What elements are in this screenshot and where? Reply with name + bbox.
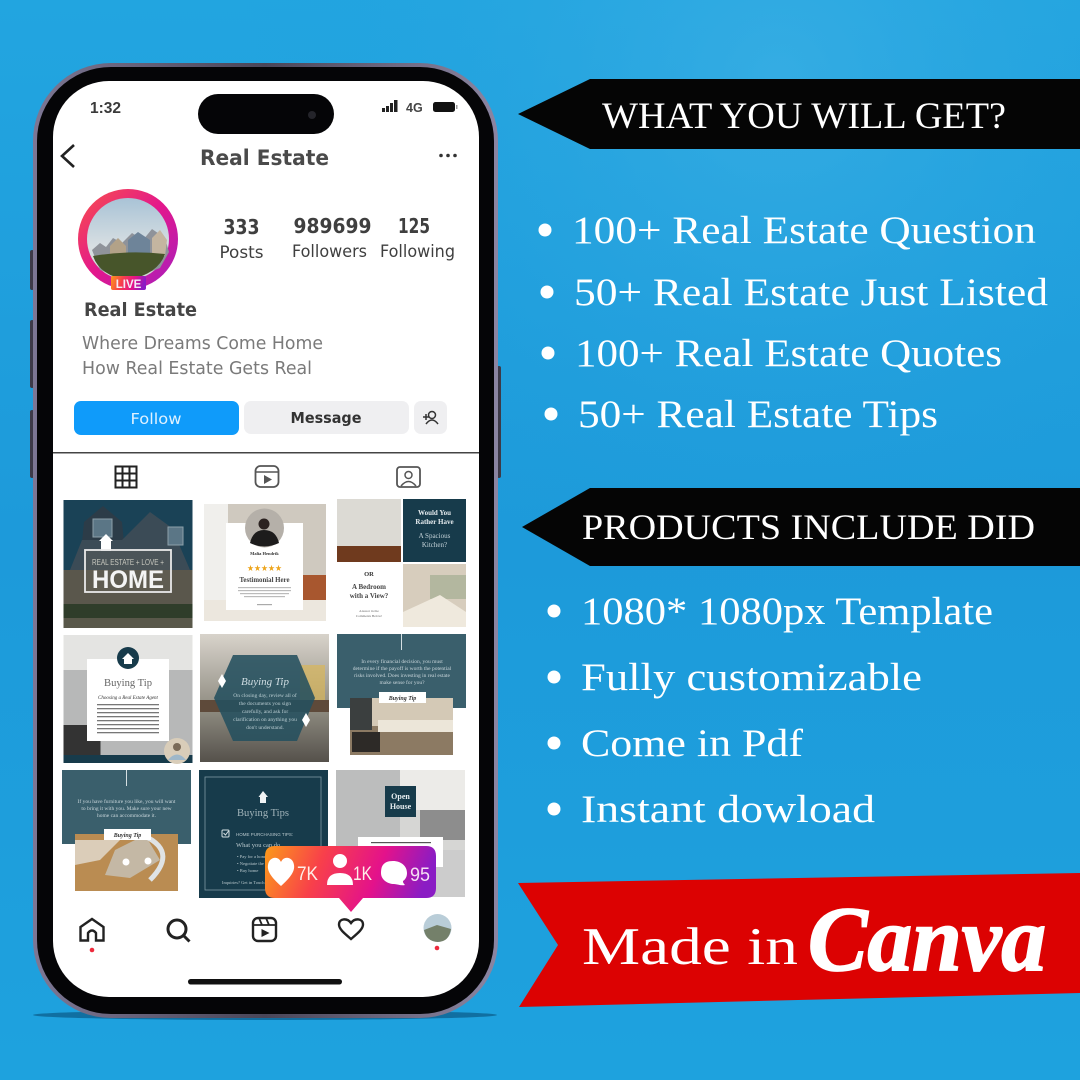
post: would you rather: A Bedroom: [352, 583, 386, 591]
icon: reels: [253, 918, 276, 941]
list item: 50+ Real Estate Tips: [578, 392, 938, 436]
profile stats: 989699: [294, 214, 372, 238]
post: make sure: Buying Tip: [113, 833, 141, 839]
icon: search: [168, 920, 190, 942]
icon: speech bubble: [381, 861, 407, 885]
post: financial decision: make sense for you?: [379, 679, 425, 686]
post: open house: [336, 770, 465, 897]
post: home: [64, 500, 192, 628]
post: buying tip hexagon: Buying Tip: [241, 676, 289, 688]
post: testimonial: [204, 504, 326, 621]
banner: products include: [522, 488, 1080, 566]
post: buying tip card: Buying Tip: [104, 678, 152, 689]
ribbon: made in canva: [518, 873, 1080, 1007]
notification badge: 95: [410, 865, 430, 886]
post: open house: House: [390, 802, 412, 811]
icon: home: [80, 919, 104, 940]
post: would you rather: Would You: [418, 509, 451, 517]
profile stats: [220, 214, 455, 262]
action buttons: Message: [290, 409, 362, 427]
post: make sure: If you have furniture you like, you will want: [78, 798, 176, 805]
banner: what you will get: WHAT YOU WILL GET?: [602, 96, 1006, 137]
list: products include: [548, 589, 993, 831]
post: would you rather: [337, 499, 466, 627]
profile header: [62, 145, 457, 171]
post: buying tips list: Inquiries? Get in Touch: [222, 880, 265, 885]
post: financial decision: Buying Tip: [388, 696, 416, 702]
post: would you rather: A Spacious: [419, 532, 451, 540]
profile bio: [82, 299, 323, 379]
ribbon: made in canva: Made in: [582, 918, 798, 976]
post: buying tip hexagon: On closing day, review all of: [233, 692, 297, 699]
status bar: 1:32: [90, 100, 121, 117]
post: home: REAL ESTATE + LOVE +: [92, 558, 164, 567]
profile stats: Following: [380, 242, 455, 261]
post: buying tip card: [64, 635, 192, 764]
post: testimonial: ★★★★★: [247, 563, 282, 573]
list item: 100+ Real Estate Quotes: [575, 331, 1002, 375]
post: home: HOME: [92, 566, 164, 594]
post: make sure: [62, 770, 191, 891]
post: would you rather: Answer in the: [359, 609, 379, 613]
icon: profile thumbnail: [424, 914, 452, 942]
post: buying tip hexagon: carefully, and ask for: [242, 708, 288, 715]
action buttons: Follow: [130, 410, 182, 428]
post: buying tips list: [199, 770, 328, 898]
profile stats: 333: [224, 215, 260, 239]
list item: 1080* 1080px Template: [581, 589, 993, 633]
phone body: [30, 63, 501, 1020]
profile stats: Posts: [220, 243, 264, 262]
avatar with live badge: [78, 189, 178, 291]
status bar: 4G: [406, 101, 423, 115]
list item: Fully customizable: [581, 655, 922, 699]
post: buying tip hexagon: the documents you sign: [239, 701, 291, 707]
list item: 100+ Real Estate Question: [572, 208, 1036, 252]
action buttons: [74, 401, 447, 435]
home indicator: [188, 979, 342, 984]
post: financial decision: [337, 634, 466, 755]
post: financial decision: risks involved. Does investing in real estate: [354, 673, 450, 679]
post: buying tips list: • Buy home: [237, 868, 258, 873]
notification badge: 1K: [353, 864, 372, 885]
profile bio: Where Dreams Come Home: [82, 333, 323, 354]
post: financial decision: In every financial decision, you must: [361, 658, 443, 665]
post: would you rather: OR: [364, 571, 374, 578]
list item: Instant dowload: [581, 787, 875, 831]
icon: heart outline: [339, 919, 363, 939]
ribbon: made in canva: Canva: [808, 888, 1046, 990]
post: would you rather: Kitchen?: [422, 541, 447, 549]
post: testimonial: Testimonial Here: [240, 576, 290, 584]
profile header: Real Estate: [200, 146, 329, 171]
profile bio: How Real Estate Gets Real: [82, 358, 312, 379]
profile stats: 125: [398, 214, 430, 238]
post: buying tip card: Choosing a Real Estate Agent: [98, 696, 159, 701]
post: make sure: to bring it with you. Make sure your new: [81, 806, 172, 812]
phone mockup: [30, 63, 501, 1020]
icon: heart: [268, 858, 294, 886]
post: would you rather: with a View?: [350, 592, 389, 600]
list: what you get: [538, 208, 1048, 436]
post: buying tips list: • Negotiate the: [237, 861, 264, 866]
post: buying tips list: • Pay for a home: [237, 854, 267, 859]
post: open house: Open: [391, 792, 410, 801]
post: make sure: home can accommodate it.: [97, 813, 157, 819]
post: financial decision: determine if the payoff is worth the potential: [353, 665, 452, 672]
post: would you rather: Comments Below!: [356, 614, 382, 618]
bottom navigation: [80, 914, 452, 952]
post: buying tip hexagon: clarification on anything you: [233, 716, 297, 723]
banner: what you will get: [518, 79, 1080, 149]
post: buying tips list: Buying Tips: [237, 808, 289, 819]
notification badge: [265, 846, 436, 912]
list item: Come in Pdf: [581, 721, 804, 765]
icon: person: [327, 854, 353, 885]
post: buying tips list: HOME PURCHASING TIPS:: [236, 832, 293, 837]
notification badge: 7K: [297, 864, 318, 885]
avatar with live badge: LIVE: [116, 279, 142, 291]
status bar: [90, 94, 458, 134]
profile tabs: [116, 466, 420, 488]
banner: products include: PRODUCTS INCLUDE DID: [582, 507, 1035, 547]
post: buying tip hexagon: don't understand.: [246, 725, 284, 731]
post: testimonial: Malia Hendrik: [250, 551, 279, 556]
post grid: [62, 499, 466, 898]
profile bio: Real Estate: [84, 299, 197, 321]
list item: 50+ Real Estate Just Listed: [574, 270, 1048, 314]
post: buying tips list: What you can do...: [236, 842, 285, 849]
profile stats: Followers: [292, 242, 367, 261]
post: would you rather: Rather Have: [415, 518, 454, 526]
post: buying tip hexagon: [200, 634, 329, 762]
